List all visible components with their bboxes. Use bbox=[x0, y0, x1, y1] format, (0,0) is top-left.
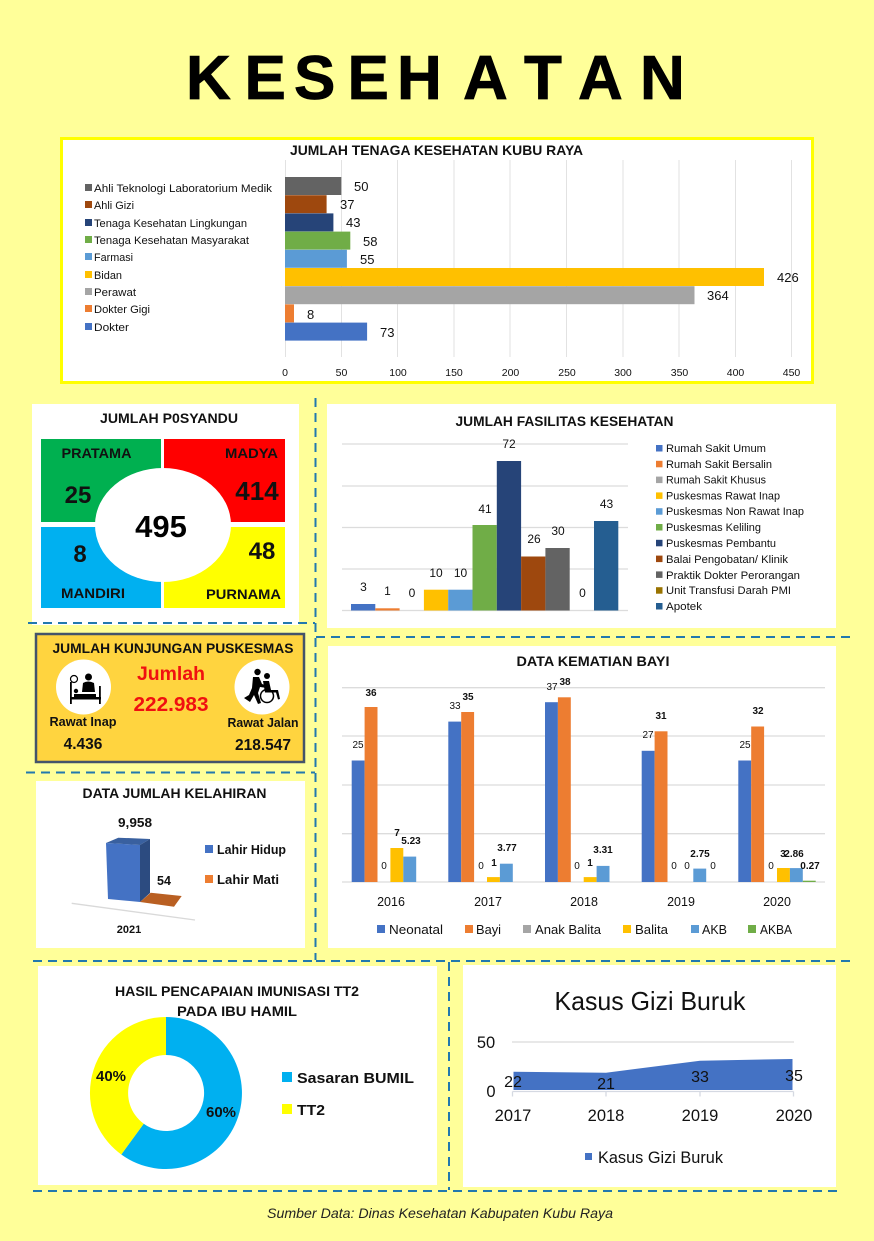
quadrant: madya: 414 bbox=[235, 476, 279, 506]
column chart: kematian bayi: 0 bbox=[478, 861, 484, 872]
quadrant: purnama bbox=[164, 527, 285, 608]
legend: kematian bayi: Balita bbox=[635, 923, 668, 937]
column chart: kematian bayi: 3 bbox=[780, 849, 786, 860]
column chart: kematian bayi: 3.77 bbox=[497, 843, 517, 854]
legend: fasilitas: Balai Pengobatan/ Klinik bbox=[666, 554, 789, 566]
legend: kelahiran bbox=[205, 842, 286, 887]
column chart: fasilitas: 0 bbox=[579, 586, 586, 600]
column chart: fasilitas: 72 bbox=[502, 437, 516, 451]
quadrant: pratama: PRATAMA bbox=[62, 445, 132, 461]
column chart: kematian bayi: 1 bbox=[491, 858, 497, 869]
axis labels: gizi buruk: 0 bbox=[486, 1083, 496, 1101]
axis labels: gizi buruk: 2019 bbox=[682, 1107, 718, 1125]
values: kelahiran: 9,958 bbox=[118, 816, 152, 830]
heading: tenaga kesehatan: JUMLAH TENAGA KESEHATAN KUBU RAYA bbox=[290, 142, 583, 158]
column chart: fasilitas: 3 bbox=[360, 580, 367, 594]
column chart: kematian bayi: 36 bbox=[365, 688, 377, 699]
axis labels: tenaga kesehatan bbox=[282, 367, 800, 379]
legend: fasilitas: Unit Transfusi Darah PMI bbox=[666, 585, 791, 597]
legend: fasilitas: Rumah Sakit Khusus bbox=[666, 474, 766, 486]
column chart: kematian bayi: 1 bbox=[587, 858, 593, 869]
total visits: 222.983 bbox=[134, 694, 208, 716]
axis labels: gizi buruk bbox=[477, 1034, 812, 1125]
x axis years bbox=[377, 895, 791, 909]
column chart: kematian bayi: 0 bbox=[381, 861, 387, 872]
heading: imunisasi: PADA IBU HAMIL bbox=[177, 1004, 297, 1019]
values: kelahiran: 54 bbox=[157, 874, 171, 888]
x axis years: 2017 bbox=[474, 895, 502, 909]
horizontal bar chart: 43 bbox=[346, 215, 360, 230]
quadrant: mandiri: MANDIRI bbox=[61, 585, 125, 601]
panel: data kematian bayi bbox=[328, 646, 836, 948]
3d bar: lahir hidup bbox=[106, 838, 150, 902]
horizontal bar chart: 8 bbox=[307, 307, 314, 322]
column chart: kematian bayi: 25 bbox=[352, 740, 364, 751]
axis labels: tenaga kesehatan: 150 bbox=[445, 367, 463, 379]
axis labels: gizi buruk: 2020 bbox=[776, 1107, 812, 1125]
legend: imunisasi bbox=[282, 1070, 414, 1119]
total visits: Jumlah bbox=[137, 664, 205, 685]
horizontal bar chart: 73 bbox=[380, 325, 394, 340]
panel: jumlah tenaga kesehatan bbox=[62, 138, 812, 382]
panel: hasil pencapaian imunisasi bbox=[38, 966, 437, 1185]
legend: kematian bayi: AKBA bbox=[760, 923, 793, 937]
heading: posyandu: JUMLAH P0SYANDU bbox=[100, 410, 238, 426]
column chart: fasilitas: 30 bbox=[551, 524, 565, 538]
column chart: kematian bayi: 0 bbox=[574, 861, 580, 872]
column chart: kematian bayi: 3.31 bbox=[593, 845, 613, 856]
column chart: fasilitas: 10 bbox=[454, 566, 467, 580]
legend: kematian bayi: Anak Balita bbox=[535, 923, 601, 937]
legend: tenaga kesehatan bbox=[85, 183, 273, 334]
axis labels: gizi buruk: 2018 bbox=[588, 1107, 624, 1125]
column chart: kematian bayi: 31 bbox=[655, 711, 667, 722]
horizontal bar chart: 50 bbox=[354, 179, 368, 194]
axis labels: gizi buruk: 50 bbox=[477, 1034, 495, 1052]
horizontal bar chart bbox=[285, 177, 799, 341]
area chart: 21 bbox=[597, 1076, 615, 1093]
legend: tenaga kesehatan: Bidan bbox=[94, 270, 122, 282]
legend: tenaga kesehatan: Ahli Gizi bbox=[94, 200, 134, 212]
axis labels: gizi buruk: 2017 bbox=[495, 1107, 531, 1125]
centre total bbox=[95, 468, 231, 582]
legend: tenaga kesehatan: Farmasi bbox=[94, 252, 133, 264]
legend: fasilitas bbox=[656, 443, 804, 613]
donut chart: 40% bbox=[96, 1068, 126, 1085]
panel: jumlah kunjungan puskesmas bbox=[36, 634, 304, 762]
heading: imunisasi bbox=[115, 984, 359, 1019]
rawat inap value: 4.436 bbox=[64, 736, 103, 753]
x axis years: 2019 bbox=[667, 895, 695, 909]
rawat jalan value: Rawat Jalan bbox=[228, 715, 299, 730]
column chart: kematian bayi: 0 bbox=[768, 861, 774, 872]
values: kelahiran: 2021 bbox=[117, 924, 141, 936]
source note: Sumber Data: Dinas Kesehatan Kabupaten Kubu Raya bbox=[267, 1205, 613, 1221]
column chart: kematian bayi: 25 bbox=[739, 740, 751, 751]
area chart bbox=[504, 1059, 803, 1096]
legend: tenaga kesehatan: Dokter bbox=[94, 322, 129, 334]
axis labels: tenaga kesehatan: 400 bbox=[727, 367, 744, 379]
horizontal bar chart: 426 bbox=[777, 270, 799, 285]
heading: kematian bayi: DATA KEMATIAN BAYI bbox=[516, 653, 670, 669]
quadrant: pratama bbox=[41, 439, 161, 522]
column chart: fasilitas: 0 bbox=[409, 586, 416, 600]
quadrant: purnama: PURNAMA bbox=[206, 586, 281, 602]
legend: kematian bayi bbox=[377, 923, 793, 937]
axis labels: tenaga kesehatan: 50 bbox=[336, 367, 347, 379]
legend: tenaga kesehatan: Tenaga Kesehatan Lingkungan bbox=[94, 218, 247, 230]
panel: kasus gizi buruk bbox=[463, 965, 836, 1187]
legend: kematian bayi: AKB bbox=[702, 923, 727, 937]
column chart: kematian bayi: 2.75 bbox=[690, 849, 710, 860]
legend: kematian bayi: Neonatal bbox=[389, 923, 443, 937]
legend: fasilitas: Puskesmas Keliling bbox=[666, 522, 761, 534]
panel: data jumlah kelahiran bbox=[36, 781, 305, 948]
heading: fasilitas: JUMLAH FASILITAS KESEHATAN bbox=[456, 413, 674, 429]
quadrant: madya bbox=[164, 439, 285, 522]
horizontal bar chart: 364 bbox=[707, 288, 729, 303]
legend: fasilitas: Puskesmas Rawat Inap bbox=[666, 490, 780, 502]
horizontal bar chart: 58 bbox=[363, 234, 377, 249]
rawat jalan value bbox=[228, 715, 299, 754]
icon: rawat jalan wheelchair bbox=[234, 660, 290, 714]
axis labels: tenaga kesehatan: 450 bbox=[783, 367, 800, 379]
legend: imunisasi: TT2 bbox=[297, 1102, 325, 1119]
column chart: kematian bayi: 7 bbox=[394, 828, 400, 839]
legend: fasilitas: Apotek bbox=[666, 601, 703, 613]
legend: tenaga kesehatan: Ahli Teknologi Laboratorium Medik bbox=[94, 183, 273, 195]
legend: fasilitas: Puskesmas Pembantu bbox=[666, 538, 776, 550]
column chart: kematian bayi: 27 bbox=[642, 730, 654, 741]
column chart: fasilitas: 1 bbox=[384, 584, 391, 598]
centre total: 495 bbox=[135, 509, 187, 544]
legend: fasilitas: Praktik Dokter Perorangan bbox=[666, 570, 800, 582]
title: KESEHATAN bbox=[186, 44, 685, 113]
quadrant: mandiri: 8 bbox=[73, 541, 87, 568]
horizontal bar chart: 55 bbox=[360, 252, 374, 267]
legend: gizi buruk: Kasus Gizi Buruk bbox=[598, 1149, 724, 1167]
column chart: kematian bayi: 0 bbox=[684, 861, 690, 872]
column chart: kematian bayi: 33 bbox=[449, 701, 461, 712]
legend: tenaga kesehatan: Tenaga Kesehatan Masyarakat bbox=[94, 235, 249, 247]
column chart: kematian bayi: 0 bbox=[671, 861, 677, 872]
x axis years: 2020 bbox=[763, 895, 791, 909]
column chart: kematian bayi bbox=[352, 677, 820, 882]
legend: tenaga kesehatan: Perawat bbox=[94, 287, 136, 299]
values: kelahiran bbox=[117, 816, 171, 936]
total visits bbox=[134, 664, 208, 716]
area chart: 33 bbox=[691, 1069, 709, 1086]
legend: kematian bayi: Bayi bbox=[476, 923, 501, 937]
quadrant: purnama: 48 bbox=[249, 538, 275, 565]
donut chart: 60% bbox=[206, 1104, 236, 1121]
column chart: fasilitas: 41 bbox=[478, 502, 492, 516]
axis labels: tenaga kesehatan: 0 bbox=[282, 367, 288, 379]
heading: gizi buruk: Kasus Gizi Buruk bbox=[554, 986, 746, 1016]
axis labels: tenaga kesehatan: 200 bbox=[502, 367, 519, 379]
quadrant: mandiri bbox=[41, 527, 161, 608]
3d bar: lahir mati bbox=[140, 893, 182, 907]
panel: jumlah fasilitas kesehatan bbox=[327, 404, 836, 628]
donut chart bbox=[90, 1017, 242, 1169]
rawat inap value: Rawat Inap bbox=[50, 714, 117, 729]
heading: kelahiran: DATA JUMLAH KELAHIRAN bbox=[82, 785, 266, 801]
legend: kelahiran: Lahir Hidup bbox=[217, 842, 286, 857]
rawat jalan value: 218.547 bbox=[235, 737, 291, 754]
column chart: fasilitas: 10 bbox=[429, 566, 443, 580]
heading: kunjungan: JUMLAH KUNJUNGAN PUSKESMAS bbox=[52, 640, 294, 656]
column chart: fasilitas bbox=[351, 437, 618, 610]
column chart: kematian bayi: 37 bbox=[546, 682, 558, 693]
legend: imunisasi: Sasaran BUMIL bbox=[297, 1070, 414, 1087]
column chart: kematian bayi: 35 bbox=[462, 692, 474, 703]
column chart: kematian bayi: 0.27 bbox=[800, 861, 820, 872]
quadrant: pratama: 25 bbox=[65, 482, 91, 509]
legend: fasilitas: Rumah Sakit Umum bbox=[666, 443, 766, 455]
x axis years: 2018 bbox=[570, 895, 598, 909]
column chart: kematian bayi: 0 bbox=[710, 861, 716, 872]
horizontal bar chart: 37 bbox=[340, 197, 354, 212]
icon: rawat inap bed bbox=[56, 660, 111, 714]
column chart: fasilitas: 26 bbox=[527, 532, 541, 546]
x axis years: 2016 bbox=[377, 895, 405, 909]
legend: kelahiran: Lahir Mati bbox=[217, 872, 279, 887]
rawat inap value bbox=[50, 714, 117, 753]
axis labels: tenaga kesehatan: 100 bbox=[389, 367, 407, 379]
quadrant: madya: MADYA bbox=[225, 445, 278, 461]
area chart: 35 bbox=[785, 1068, 803, 1085]
axis labels: tenaga kesehatan: 300 bbox=[614, 367, 632, 379]
panel: jumlah posyandu bbox=[32, 404, 299, 625]
legend: tenaga kesehatan: Dokter Gigi bbox=[94, 304, 150, 316]
legend: fasilitas: Rumah Sakit Bersalin bbox=[666, 459, 772, 471]
area chart: 22 bbox=[504, 1074, 522, 1091]
axis labels: tenaga kesehatan: 250 bbox=[558, 367, 576, 379]
column chart: kematian bayi: 2.86 bbox=[784, 849, 804, 860]
axis labels: tenaga kesehatan: 350 bbox=[671, 367, 688, 379]
column chart: fasilitas: 43 bbox=[600, 497, 613, 511]
column chart: kematian bayi: 5.23 bbox=[401, 836, 421, 847]
heading: imunisasi: HASIL PENCAPAIAN IMUNISASI TT2 bbox=[115, 984, 359, 999]
legend: fasilitas: Puskesmas Non Rawat Inap bbox=[666, 506, 804, 518]
column chart: kematian bayi: 38 bbox=[559, 677, 571, 688]
column chart: kematian bayi: 32 bbox=[752, 706, 764, 717]
